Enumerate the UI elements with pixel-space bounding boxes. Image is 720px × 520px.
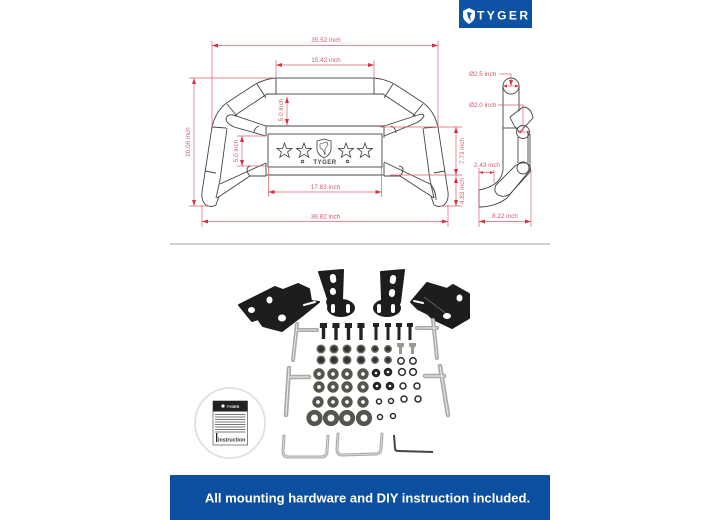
front view dimension labels: 7.73 inch <box>459 138 466 164</box>
instruction sheet <box>213 401 248 445</box>
hardware: mounting brackets <box>239 270 469 331</box>
side view dimension labels: 2.43 inch <box>474 162 500 169</box>
front view drawing of bull bar <box>202 78 448 206</box>
banner <box>170 475 550 520</box>
right center bracket <box>373 270 404 317</box>
instruction sheet: Instruction <box>218 438 245 444</box>
center plate <box>268 134 382 167</box>
hardware: T-bolts <box>286 320 448 415</box>
front view dimension labels: 35.52 inch <box>311 37 341 44</box>
front view tube outlines <box>202 78 448 206</box>
side view dimensions <box>479 74 531 227</box>
instruction sheet: TYGER <box>227 405 240 409</box>
front view dimension labels: 38.82 inch <box>311 214 341 220</box>
instruction badge <box>195 388 265 458</box>
front view dimension labels: 17.83 inch <box>311 184 341 191</box>
inner upper tubes <box>226 115 266 136</box>
hardware: washers <box>309 358 421 424</box>
front view drawing of bull bar: TYGER <box>313 160 337 166</box>
left center bracket <box>319 270 355 317</box>
left outer bracket <box>239 284 319 331</box>
hardware: small screws <box>397 343 416 354</box>
hardware: U-bolts and hex key <box>283 434 433 457</box>
front view dimension labels: 4.83 inch <box>459 178 466 204</box>
banner: All mounting hardware and DIY instruction included. <box>205 490 530 506</box>
side view dimension labels: Ø2.5 inch <box>469 71 497 78</box>
hex key <box>394 435 433 452</box>
hardware: nuts <box>317 345 391 364</box>
side view dimension labels: Ø2.0 inch <box>469 102 497 109</box>
front view dimension labels: 5.0 inch <box>233 139 240 162</box>
hardware: bolts <box>320 323 413 340</box>
right outer bracket <box>411 283 469 328</box>
plate stars and emblem <box>277 139 372 163</box>
front view dimension labels: 20.06 inch <box>185 127 192 157</box>
divider <box>170 243 550 245</box>
front view dimension labels: 15.42 inch <box>311 57 341 64</box>
front view dimensions <box>189 41 462 227</box>
front view dimension labels: 5.0 inch <box>278 98 285 121</box>
side view dimension labels <box>469 71 518 220</box>
logo: TYGER badge: TYGER <box>477 8 528 22</box>
side view drawing of bull bar <box>479 78 533 207</box>
front view dimension labels <box>185 37 466 220</box>
logo: TYGER badge <box>459 0 532 28</box>
lower inner tubes <box>217 163 266 198</box>
side view dimension labels: 8.22 inch <box>492 213 518 220</box>
